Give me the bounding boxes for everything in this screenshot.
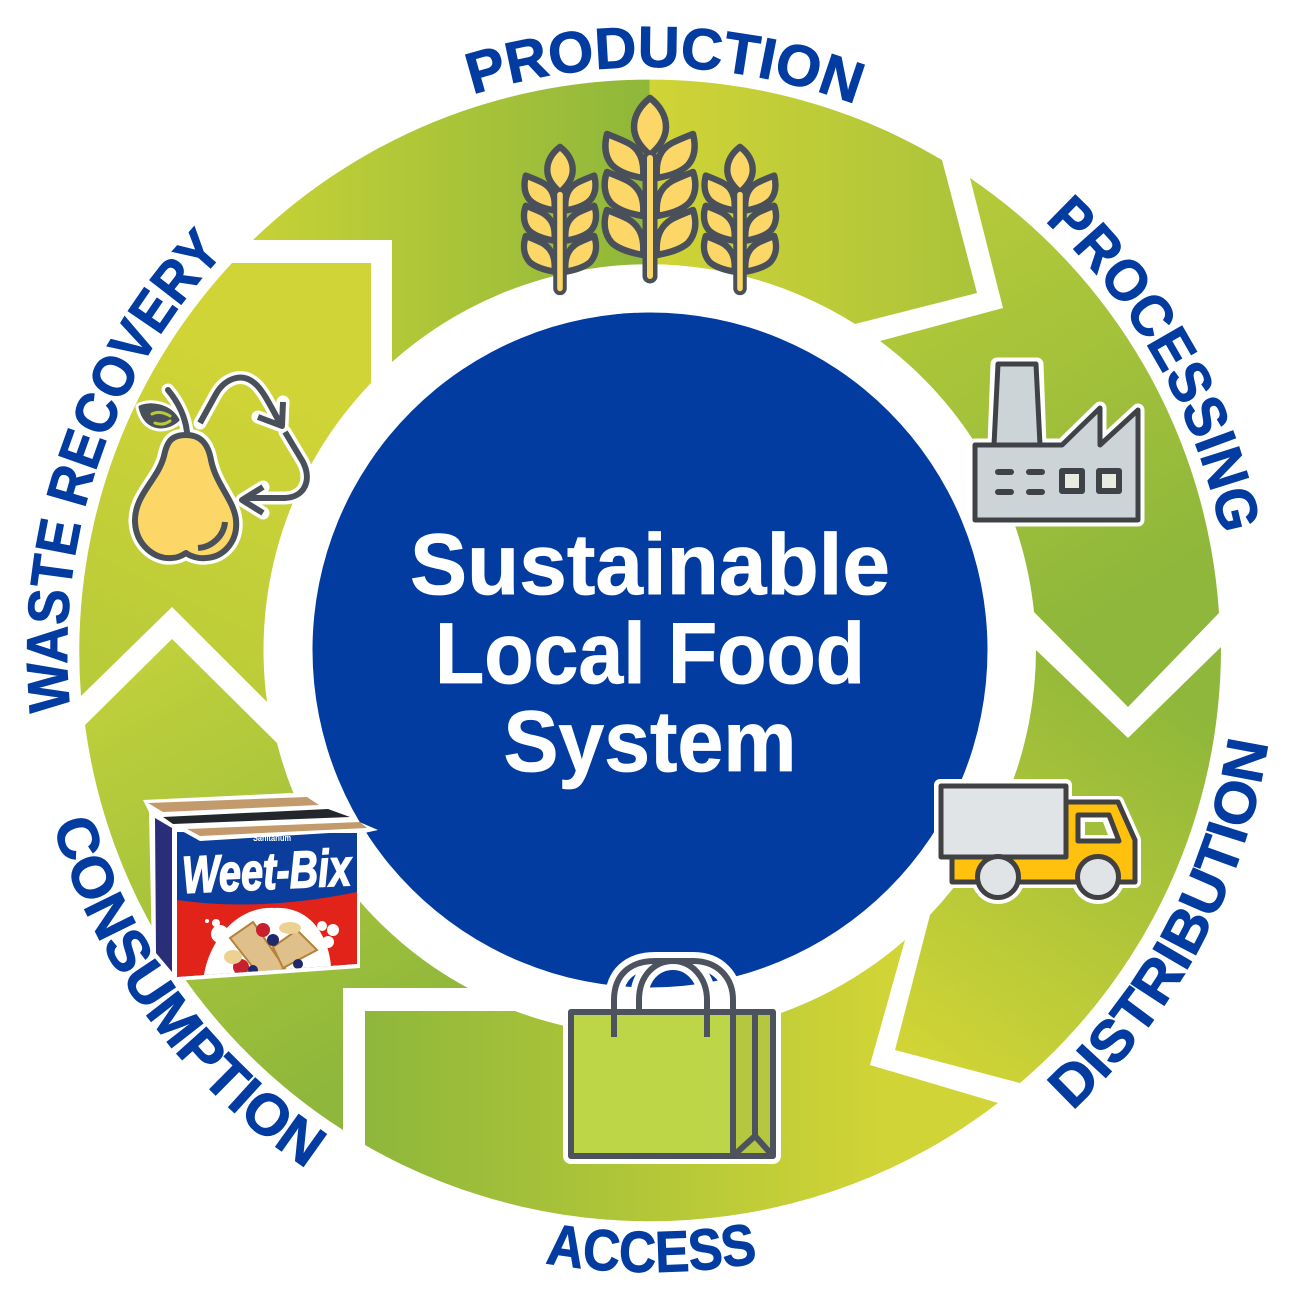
box white outline [143, 793, 378, 981]
heading: consumption: CONSUMPTION [57, 818, 328, 1168]
title: Sustainable Local Food System [410, 517, 890, 790]
box front [177, 832, 357, 985]
icon: left wheat stalk [524, 147, 596, 288]
title: Sustainable Local Food System: Local Food [435, 606, 865, 702]
panel: distribution arrow segment [895, 647, 1221, 1083]
box logo: Weet-Bix: Weet-Bix [181, 839, 354, 905]
icon: factory [975, 364, 1138, 520]
icon: centre wheat stalk [605, 98, 695, 276]
panel: production arrow segment [253, 80, 977, 362]
icon: delivery truck [940, 785, 1135, 904]
panel: waste recovery arrow segment [79, 263, 371, 702]
icon: wheat stalks [524, 98, 776, 288]
icon: right wheat stalk [704, 147, 776, 288]
title: Sustainable Local Food System: Sustainable [410, 517, 890, 613]
box side panel [155, 818, 172, 972]
panel: processing arrow segment [880, 178, 1219, 707]
icon: shopping bag [571, 961, 773, 1156]
centre circle [312, 312, 988, 988]
title: Sustainable Local Food System: System [504, 694, 796, 790]
icon: pear with recycling arrows [135, 378, 307, 558]
heading: production: PRODUCTION [464, 26, 865, 104]
heading: access: ACCESS [546, 1224, 755, 1273]
icon: weet-bix cereal box [143, 793, 378, 985]
heading: distribution: DISTRIBUTION [1046, 739, 1268, 1109]
box top flaps [148, 797, 378, 841]
heading: waste recovery: WASTE RECOVERY [26, 226, 216, 714]
box brand text: Sanitarium [253, 833, 291, 843]
heading: processing: PROCESSING [1046, 194, 1258, 530]
panel: consumption arrow segment [85, 639, 468, 1130]
panel: access arrow segment [365, 940, 998, 1221]
